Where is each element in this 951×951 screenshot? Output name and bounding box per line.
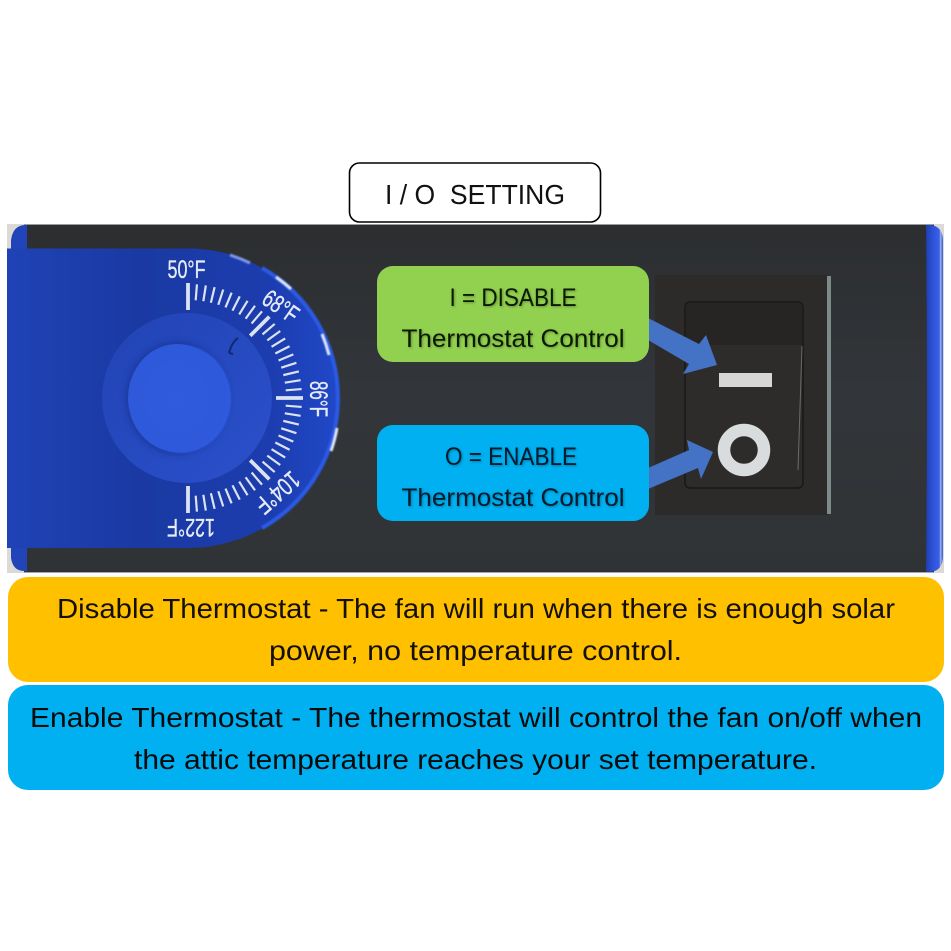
callout: disable thermostat control: I = DISABLE (450, 284, 576, 312)
text block: disable thermostat description: power, no temperature control. (269, 635, 682, 666)
temperature ticks (188, 283, 303, 513)
thermostat knob (102, 313, 272, 483)
temperature labels: 50°F (168, 256, 206, 284)
title (350, 163, 600, 222)
callout: enable thermostat control: Thermostat Control (402, 484, 624, 512)
minor ticks (196, 284, 302, 512)
temperature labels: 86°F (304, 381, 332, 417)
callout: enable thermostat control: O = ENABLE (445, 443, 577, 471)
text block: enable thermostat description: Enable Thermostat - The thermostat will control the fan on/off when (30, 702, 922, 733)
text block: enable thermostat description: the attic temperature reaches your set temperature. (134, 744, 817, 775)
major ticks (188, 283, 303, 513)
rocker switch (685, 302, 803, 488)
right blue edge (926, 225, 943, 572)
temperature labels: 122°F (167, 513, 215, 541)
O symbol (724, 430, 764, 470)
thermostat dial (7, 248, 338, 548)
arrow: enable label to O (648, 440, 713, 489)
I symbol (719, 373, 772, 387)
housing light edge (827, 276, 831, 514)
arrow: disable label to I (648, 318, 717, 374)
panel: thermostat and switch photo (7, 224, 944, 573)
text block: enable thermostat description (8, 685, 944, 790)
callout: disable thermostat control: Thermostat Control (402, 325, 624, 353)
temperature labels: 104°F (249, 465, 305, 519)
callout: enable thermostat control (377, 425, 649, 521)
text block: disable thermostat description (8, 577, 944, 682)
temperature labels: 68°F (257, 284, 304, 329)
switch housing (655, 275, 831, 515)
dial rim highlight (262, 268, 338, 528)
temperature labels (167, 256, 332, 541)
text block: disable thermostat description: Disable Thermostat - The fan will run when there is enough solar (57, 593, 895, 624)
callout: disable thermostat control (377, 266, 649, 362)
title: I / O SETTING (385, 179, 565, 210)
panel tabs (11, 225, 27, 571)
dial plate (7, 248, 338, 548)
